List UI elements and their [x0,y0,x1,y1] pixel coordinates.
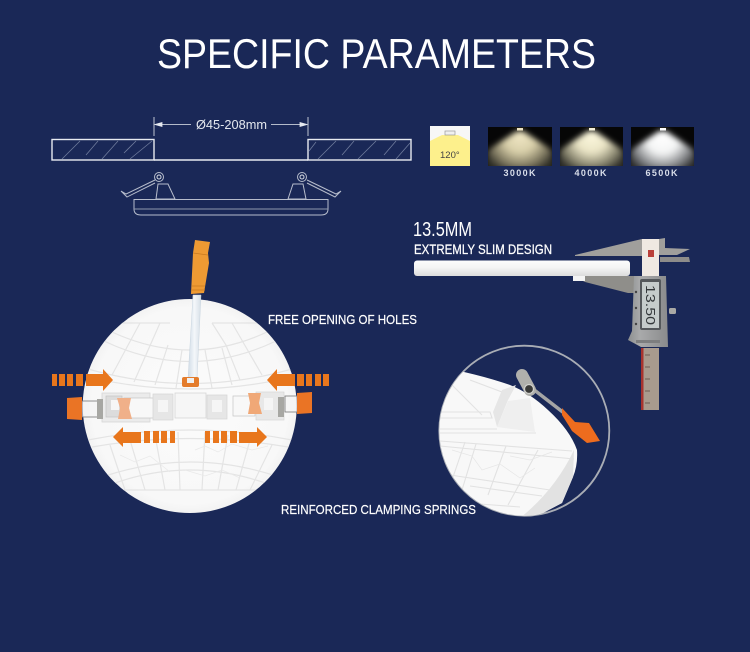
label: free opening of holes: FREE OPENING OF HOLES [268,312,417,327]
inset lamp body [430,372,577,520]
right clamp spring [248,392,312,417]
angle label: 120° [440,150,460,161]
inset spring rod [533,389,564,413]
slim panel side view [414,260,630,276]
right spring [288,172,341,199]
title: SPECIFIC PARAMETERS [157,30,596,77]
panel: 3000K light [488,127,552,166]
label: 3000K: 3000K [504,168,536,178]
caliper jaws [573,238,690,293]
panel: 6500K light [631,127,694,166]
globe relief lines [84,323,296,490]
text: extremely slim design: EXTREMLY SLIM DESIGN [414,241,552,257]
caliper body [628,276,676,347]
fixture side view outline [121,172,341,215]
cable [188,295,201,379]
orange connector [191,240,210,294]
central metal bridge [102,392,284,422]
caliper measuring the slim panel [414,238,690,410]
heading: 13.5MM: 13.5MM [413,219,472,241]
inset orange tab [562,408,600,443]
inset spring barrel [522,375,534,394]
left ceiling section [52,140,154,160]
panel: 4000K light [560,127,623,166]
label: 6500K: 6500K [646,168,678,178]
arrow: upper right pointing inward [267,369,329,391]
dimension label: Ø45-208mm [196,118,267,132]
arrow: lower right pointing outward [205,427,267,447]
label: reinforced clamping springs: REINFORCED CLAMPING SPRINGS [281,502,476,517]
ceiling cutout diagram [52,117,411,160]
label: 4000K: 4000K [574,168,607,178]
arrow: lower left pointing outward [113,427,175,447]
main round panel light [67,240,312,513]
right ceiling section [308,140,411,160]
arrow: upper left pointing inward [52,369,113,391]
cable clip [182,377,199,387]
caliper ruler [641,239,659,410]
left spring [121,172,175,199]
inset: clamping spring close-up [430,346,609,520]
infographic canvas [51,38,694,517]
caliper reading: 13.50 [643,285,657,325]
beam angle icon [430,126,470,166]
dimension line [154,117,308,136]
left clamp spring [67,397,132,420]
